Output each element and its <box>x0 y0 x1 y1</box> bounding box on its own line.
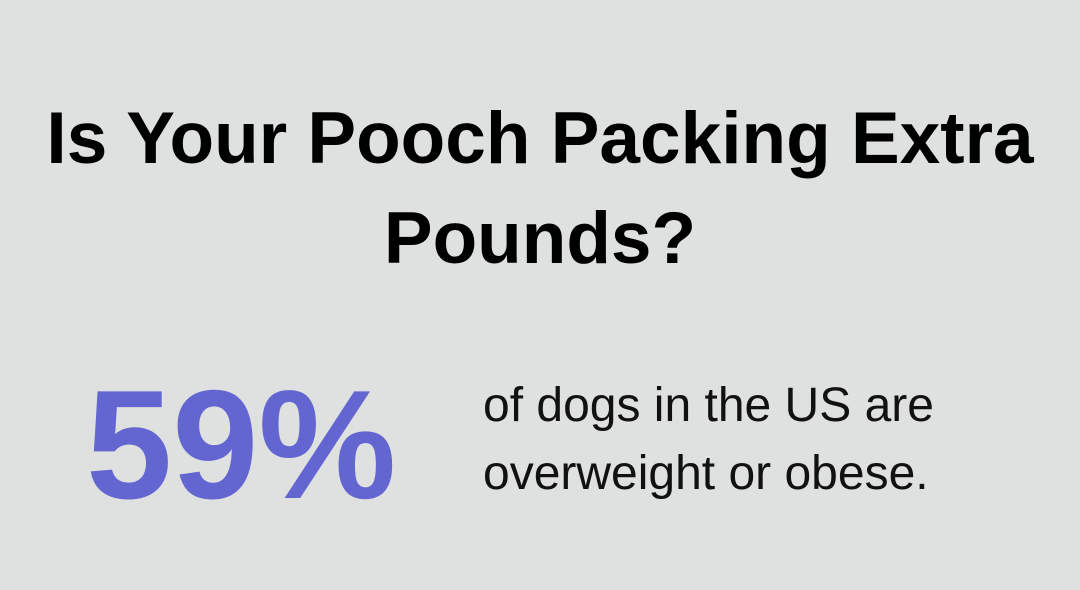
title: Pounds? <box>384 198 696 279</box>
statistic description: of dogs in the US are <box>483 379 934 432</box>
title: Is Your Pooch Packing Extra <box>46 98 1034 179</box>
statistic description: overweight or obese. <box>483 447 929 500</box>
statistic: 59%: 59% <box>86 358 396 531</box>
title <box>46 98 1034 279</box>
statistic description <box>483 379 934 500</box>
